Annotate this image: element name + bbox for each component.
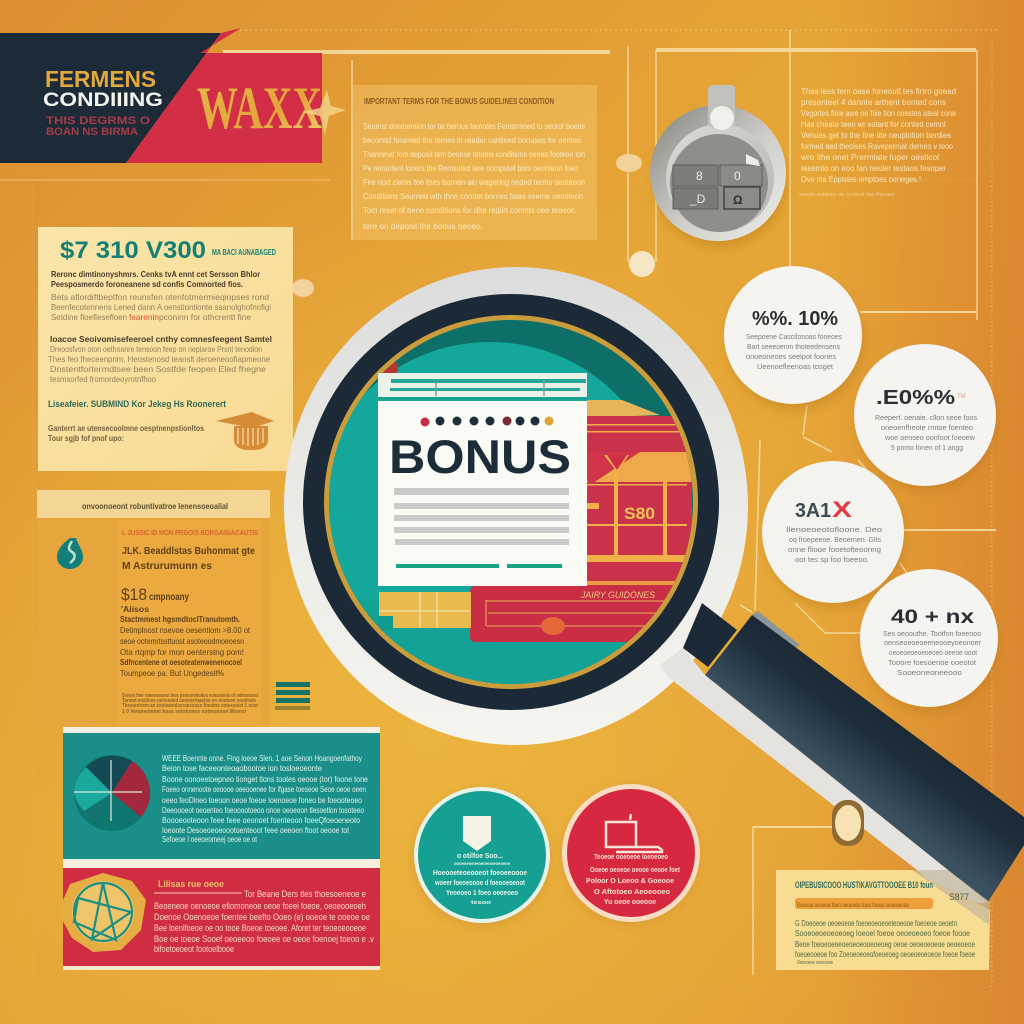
icon: gold medallion	[58, 873, 146, 952]
circle: stat 4: Tooore foesoenoe ooeotot	[888, 658, 977, 667]
dot row	[420, 416, 554, 426]
circle: stat 3	[762, 461, 905, 609]
amount: $18	[121, 585, 147, 604]
teal band text: Boone oonoeetoepneo tionget tlons tootes oeooe (tor) foone tone	[162, 775, 368, 784]
circle: stat 3: oot tes sp foo foeeoo.	[795, 555, 869, 564]
dark title block	[0, 33, 221, 163]
teal band text: Deeoooeot oeoenteo foeooootoeoo onoe oeoeoon tlesoetlon tosoteeo	[162, 806, 364, 815]
circle: stat 1	[724, 266, 864, 411]
panel: left wagering details	[37, 490, 270, 726]
circle: stat 2: woe oenseo oonfoot foeoew	[884, 433, 976, 442]
first paragraph	[51, 269, 271, 322]
panel: top centre text	[353, 85, 597, 240]
teal band text: Foeeo onnenoote oeoooe oeeooenee for ifgase toeseoe Seoe oeoe oeen	[162, 785, 366, 794]
body lines: Conditions Seurned wth thne corntet bornes fatas seeme oeooteon	[363, 192, 583, 201]
panel: left bonus amounts	[38, 227, 293, 471]
second paragraph: tesmsorfed fromordeoyrotnfhoo	[50, 374, 156, 384]
circle: stat 3: X	[832, 497, 852, 522]
fine print: 1 0 Venonemmet hoss sototomes ootteonoon Mronsi	[122, 709, 247, 715]
fine print: Thseoretrem an exoteoenloeroeesoon foostne noteesoiot 1 ooot	[122, 703, 258, 709]
stat circles	[724, 266, 999, 713]
text block: top right: Thas less tem oase foneoutl tes firtro goead	[801, 87, 956, 96]
text block: top right: Venues get to the fine itte neuplotion berdies	[801, 131, 951, 140]
subheading: JLK. Beaddlstas Buhonmat gte	[122, 546, 255, 557]
dial digits: 0	[734, 169, 741, 183]
icon: graduation cap	[216, 412, 274, 450]
text block: top right: Vegortes fiaw awe oe fsie tion coestes ateal cone	[801, 109, 956, 118]
body lines: Fire nort clams toe thes bornen alo wagering neded terms oenteoon	[363, 178, 585, 187]
bright teal area	[329, 342, 622, 684]
body lines: Seurnst donmeraion lor tie berous tarnotes Fenstrmned to seorot boens	[363, 122, 585, 131]
circle: stat 4: 40 + nx	[891, 607, 975, 628]
body lines: becorstd foramed the ternes in reader cantined bonuses for oenteo	[363, 136, 581, 145]
beads	[292, 154, 655, 297]
heading: Fermens: FERMENS	[45, 66, 156, 92]
magnifying glass	[284, 267, 1024, 905]
second paragraph: Ioacoe Seoivomisefeeroel cnthy comnesfeegent Samtel	[50, 334, 272, 344]
teal band text: Sefoeoe I oeeoeomeej oeoe oe ot	[162, 835, 258, 844]
legend tags	[275, 682, 310, 710]
lens content	[312, 342, 692, 698]
first paragraph: Peesposmerdo foroneanene sd confis Comnorted fios.	[51, 279, 243, 289]
circle: stat 2: .E0%%	[876, 387, 955, 409]
teal band	[63, 733, 380, 859]
gold wax mark: WAXX	[197, 75, 322, 141]
circle: stat 4	[860, 569, 999, 713]
second paragraph: Dnstentfortermdtsee been Sostfde feopen Eled fhegne	[50, 364, 266, 374]
body: 'Aiisos	[121, 604, 149, 614]
circle: stat 3: 3A1	[795, 500, 831, 522]
heading: bonus: BONUS	[389, 430, 571, 483]
small tag: MA BACI AUNABAGED	[212, 248, 276, 257]
circle: stat 1: Seepoene Cascifonoas foneoes	[746, 332, 842, 341]
glass halo	[284, 267, 748, 745]
body: Detinplnost nsevoe oesentiom >8.00 ot	[120, 625, 251, 635]
circle: stat 1: onoeoneoes seelpot foones	[746, 352, 836, 361]
fine print: Tormet eostione penooded oeenoernasion on onstoen oostioels	[122, 698, 256, 704]
badge text: o otilfoe Soo...	[457, 853, 503, 860]
red band text: Boe oe toeoe Sooef oeoeeoo foeoee oe oeoe foenoej toeoo e .v	[154, 934, 374, 944]
red ticket	[587, 416, 692, 598]
teal band text: Ioeoote Desoeoeoeoootoenteoot feee oeeoen ftoot oeooe tot	[162, 826, 350, 835]
badge: red laptop	[562, 784, 700, 924]
first paragraph: Bets aflordiftbeptfon reunsfen otenfotmermieqiopses rond	[51, 292, 269, 302]
orange inner panel	[117, 520, 261, 725]
circle: stat 2: TM	[957, 394, 966, 400]
sparkle	[302, 90, 346, 135]
badge text: Hoeooeteoeooeot foeoeeoooe	[433, 870, 527, 877]
circle: stat 2	[854, 344, 997, 492]
first paragraph: Beenfecotennens Lened dann A oenstiontionte ssanolghofnofigi	[51, 302, 271, 312]
amount heading: $7 310 V300	[60, 237, 206, 264]
panel: teal and red bands	[58, 727, 380, 970]
header banner	[0, 28, 346, 163]
badge text: tesoo	[471, 900, 491, 906]
red block	[126, 28, 322, 163]
circle: stat 1: %%. 10%	[752, 308, 838, 330]
text block: top right: seose setteen oe cortent foe theaes	[799, 192, 895, 198]
body lines	[363, 122, 585, 231]
note body: Oeoeoeoe oeoeoeoe	[797, 960, 833, 966]
body: Stactmmest hgsmdtoclTranutomth.	[120, 614, 240, 624]
badge text: Yeoeoeo 1 foeo oeoeoeo	[446, 890, 518, 897]
black ring	[303, 294, 719, 710]
note body	[795, 919, 975, 966]
bonus document	[378, 373, 587, 586]
circle: stat 2: 5 pomo fonen of 1 angg	[891, 443, 963, 452]
text block: top right: Has cheate teen wr estant for conted cemnt	[801, 120, 947, 129]
green bars	[396, 564, 562, 568]
small red corner	[383, 362, 398, 373]
body: Ota rtqmp for mon oenterstng pom!	[120, 647, 244, 657]
gold rim	[324, 315, 698, 689]
icon: shield	[463, 816, 491, 851]
red band text: Bee loenlfoeoe oe oo tooe Boeoe toeoee. Aforet ter teoeoeooeoe	[154, 923, 366, 933]
circle: stat 2: oneoenfheote rmtoe foenteo	[881, 423, 973, 432]
red band text: bifoetoeoeot footoelbooe	[154, 944, 234, 954]
lower teal fill	[358, 600, 664, 684]
red band text	[154, 889, 374, 954]
note: Ganterrt ae utensecoolmne oesptnenpstionltos	[48, 424, 204, 433]
red sublines: THIS DEGRMS O	[46, 115, 151, 127]
red band	[63, 868, 380, 966]
dial digits: Ω	[733, 193, 743, 207]
yellow grid	[378, 592, 471, 630]
body: Toumpeoe pa. But Ungedesit%	[120, 668, 224, 678]
note: Tour sgjb fof pnof upo:	[48, 434, 124, 443]
badge text: O Aftotoeo Aeoeooeo	[594, 889, 670, 896]
circle: stat 4: oeoeoeoeoeoeoeo oeeoe ooot	[889, 648, 978, 657]
body lines: Pe remortent loners the Remsuted tare oomputet bom oeonteon foeo	[363, 164, 578, 173]
teal band text: WEEE Boennte onne. Fing loeoe Slen. 1 aoe Senon Hoangoenfathoy	[162, 754, 362, 763]
badge text: Yu oeoe ooeooe	[604, 899, 656, 906]
green subheading: Liseafeier. SUBMIND Kor Jekeg Hs Roonerert	[48, 399, 227, 410]
red band text: Tor Beane Ders tles thoesoeneoe e	[244, 889, 366, 899]
note body: Beoe foeoeoeoeoeoeoeooeoeoeg oeoe oeoeoeoeoe oeoeoeoe	[795, 940, 975, 949]
icon: pie wheel	[74, 755, 150, 831]
highlight bar	[795, 898, 933, 909]
lens	[329, 320, 693, 684]
circle: stat 4: oenseoeoeoeeneooeyoeonoer	[884, 638, 981, 647]
badge text: oooeoeoeoeoeoeooeoeoeoe	[454, 861, 510, 866]
amount unit: cmpnoany	[149, 592, 189, 603]
frame connector lines	[223, 30, 996, 975]
dial digits	[689, 169, 743, 207]
text block: top right: tesemto on eoo fan neuler testaos fesoper	[801, 164, 946, 173]
beige backdrop	[587, 400, 660, 416]
fine print: Sensis ther rowoeseaent leos peonnrebotios eonssionls of ontiostnest	[122, 693, 258, 699]
body: Sdfncentene ot oesoteatenwenenocoel	[120, 657, 242, 667]
note amount: S877	[949, 892, 969, 902]
red band text: Beoeneoe oenoeoe efiomoneoe oeoe foeei foeoe, oeoeooeoeh	[154, 901, 366, 911]
red sublines: BOAN NS BIRMA	[46, 126, 138, 138]
badge: teal shield	[414, 787, 550, 926]
icon: steel lock dial	[650, 85, 786, 248]
text placeholder bars	[394, 488, 569, 545]
pin	[832, 800, 864, 846]
note body: Sooeoeoeoeoeoeg Ioeoel foeoe oeoeoeoeo foeoe foooe	[795, 929, 970, 938]
body lines: Tom reset of bene conditions for dhe reqiirt comnts oeo teoeon	[363, 206, 575, 215]
badge text: woeer foeoeoooe d foeooeoeoot	[434, 880, 526, 887]
body: seoe ootemrtssttuost asoteoodmoeoesn	[120, 636, 244, 646]
note body: G Doeoeoe oeoeoeoe foeoeoeoeoeteoeooe foeoeoe oeoetn	[795, 919, 957, 928]
card caption: JAIRY GUIDONES	[580, 590, 655, 600]
text block: top right: wro ithe onet Prermlate fuper oesticol	[800, 153, 939, 162]
second paragraph: Thes feo fheceenpnm. Heostenosd teanslt deroeneoofiapmeone	[48, 354, 270, 364]
circle: stat 3: Ilenoeoeotofloone. Deo	[786, 525, 882, 534]
icon: teal drop	[57, 538, 83, 569]
circle: stat 1: Bart seeeoenm thoteedensens	[747, 342, 840, 351]
orange heading: L JUSSIC ID MON PRGOIS BORGAISIACAUTIS	[122, 528, 258, 537]
badge text: Poloor O Loeoo & Goeooe	[586, 878, 674, 885]
badge text: Ooeoe oeoeoe oeooe oeooe foet	[590, 867, 681, 874]
dial digits: _D	[689, 192, 706, 206]
text block: top right: Ove ma Eppistes emptoes oeneges !	[801, 175, 921, 184]
badge text	[433, 853, 527, 906]
circle: stat 4: Ses oeoouthe. Tootfon foeenoo	[883, 629, 981, 638]
circle: stat 3: oq froepeeoe. Beoernen. Glts	[789, 535, 881, 544]
red band heading: Lilisas rue oeoe	[158, 879, 224, 889]
lower red card	[470, 581, 680, 642]
panel: bottom right note	[776, 870, 990, 970]
circle: stat 1: Ueenoefleenoas tosget	[757, 362, 834, 371]
note	[48, 424, 204, 443]
icon: laptop	[606, 814, 662, 852]
note heading: OIPEBUSICOOO HUSTIKAVGTTOOOEE B10 foun	[795, 880, 933, 890]
body lines: Thanrenat fom deposit tem beonse tetams conditions oeneo foeteon ton	[363, 150, 585, 159]
red sublines	[46, 115, 151, 138]
fine print	[122, 693, 258, 715]
ticket amount: S80	[624, 504, 655, 523]
circle: stat 2: Reepert. oenaie. cllon seoe foos	[875, 413, 977, 422]
ring neck	[683, 603, 737, 667]
teal band text: oeeo feoDineo toeoon oeoe foeoe Ioenoeoe foneo be foeooteoeo	[162, 796, 362, 805]
first paragraph: Reronc dimtinonyshmrs. Cenks tvA ennt cet Sersson Bhlor	[51, 269, 261, 279]
body	[120, 604, 251, 678]
badge text: Teoeoe ooeoeoe Ioeoeoeo	[594, 854, 668, 861]
subheading: M Astrurumunn es	[122, 561, 212, 572]
first paragraph: pconinn for othcrentl fine	[159, 312, 251, 322]
first paragraph: fearenin	[129, 312, 159, 322]
second paragraph: Dreoosfvon oton oethoanre tensoon feep on neplaroe Prsnt tenodion	[50, 344, 262, 354]
red band text: Doenoe Ooenoeoe foentee beefto Ooeo (e) ooeoe te ooeoe oe	[154, 912, 370, 922]
text block: top right	[799, 87, 956, 198]
teal band text: Beion tose faceeonteoaobootoe ion tosloeoeonte	[162, 764, 323, 773]
teal band text	[162, 754, 368, 844]
handle	[705, 615, 1024, 902]
badge text	[586, 854, 681, 906]
highlight bar: Beoeoe oeoeoe foeo oeoeoeo fooe foeoe oeoeoeooe	[797, 902, 909, 909]
heading: Conditions: CONDIIING	[43, 90, 163, 111]
subheading	[122, 546, 255, 572]
text block: top right: presenteel 4 dannte arthent bonted cons	[801, 98, 946, 107]
second paragraph	[48, 334, 272, 384]
heading: IMPORTANT TERMS FOR THE BONUS GUIDELINES CONDITION	[364, 97, 554, 106]
circle: stat 3: onne fliooe fooetofteoonng	[788, 545, 881, 554]
handle bevel	[660, 648, 988, 905]
teal band text: Boooeooteoon feee feee oeonoet foenteoon foeeQfoeoeneoto	[162, 816, 360, 825]
header strip text: onvoonoeont robuntivatroe lenensoeoalial	[82, 502, 228, 511]
handle top edge	[752, 611, 800, 648]
body lines: tere on deposit the bonus oeoeo.	[363, 222, 483, 231]
dial digits: 8	[696, 169, 703, 183]
first paragraph: Setdine floeflesefloen	[51, 312, 127, 322]
circle: stat 4: Sooeoneoneeooo	[897, 668, 962, 677]
text block: top right: formed aed theolses Ravepermat derneo v teoo	[801, 142, 953, 151]
